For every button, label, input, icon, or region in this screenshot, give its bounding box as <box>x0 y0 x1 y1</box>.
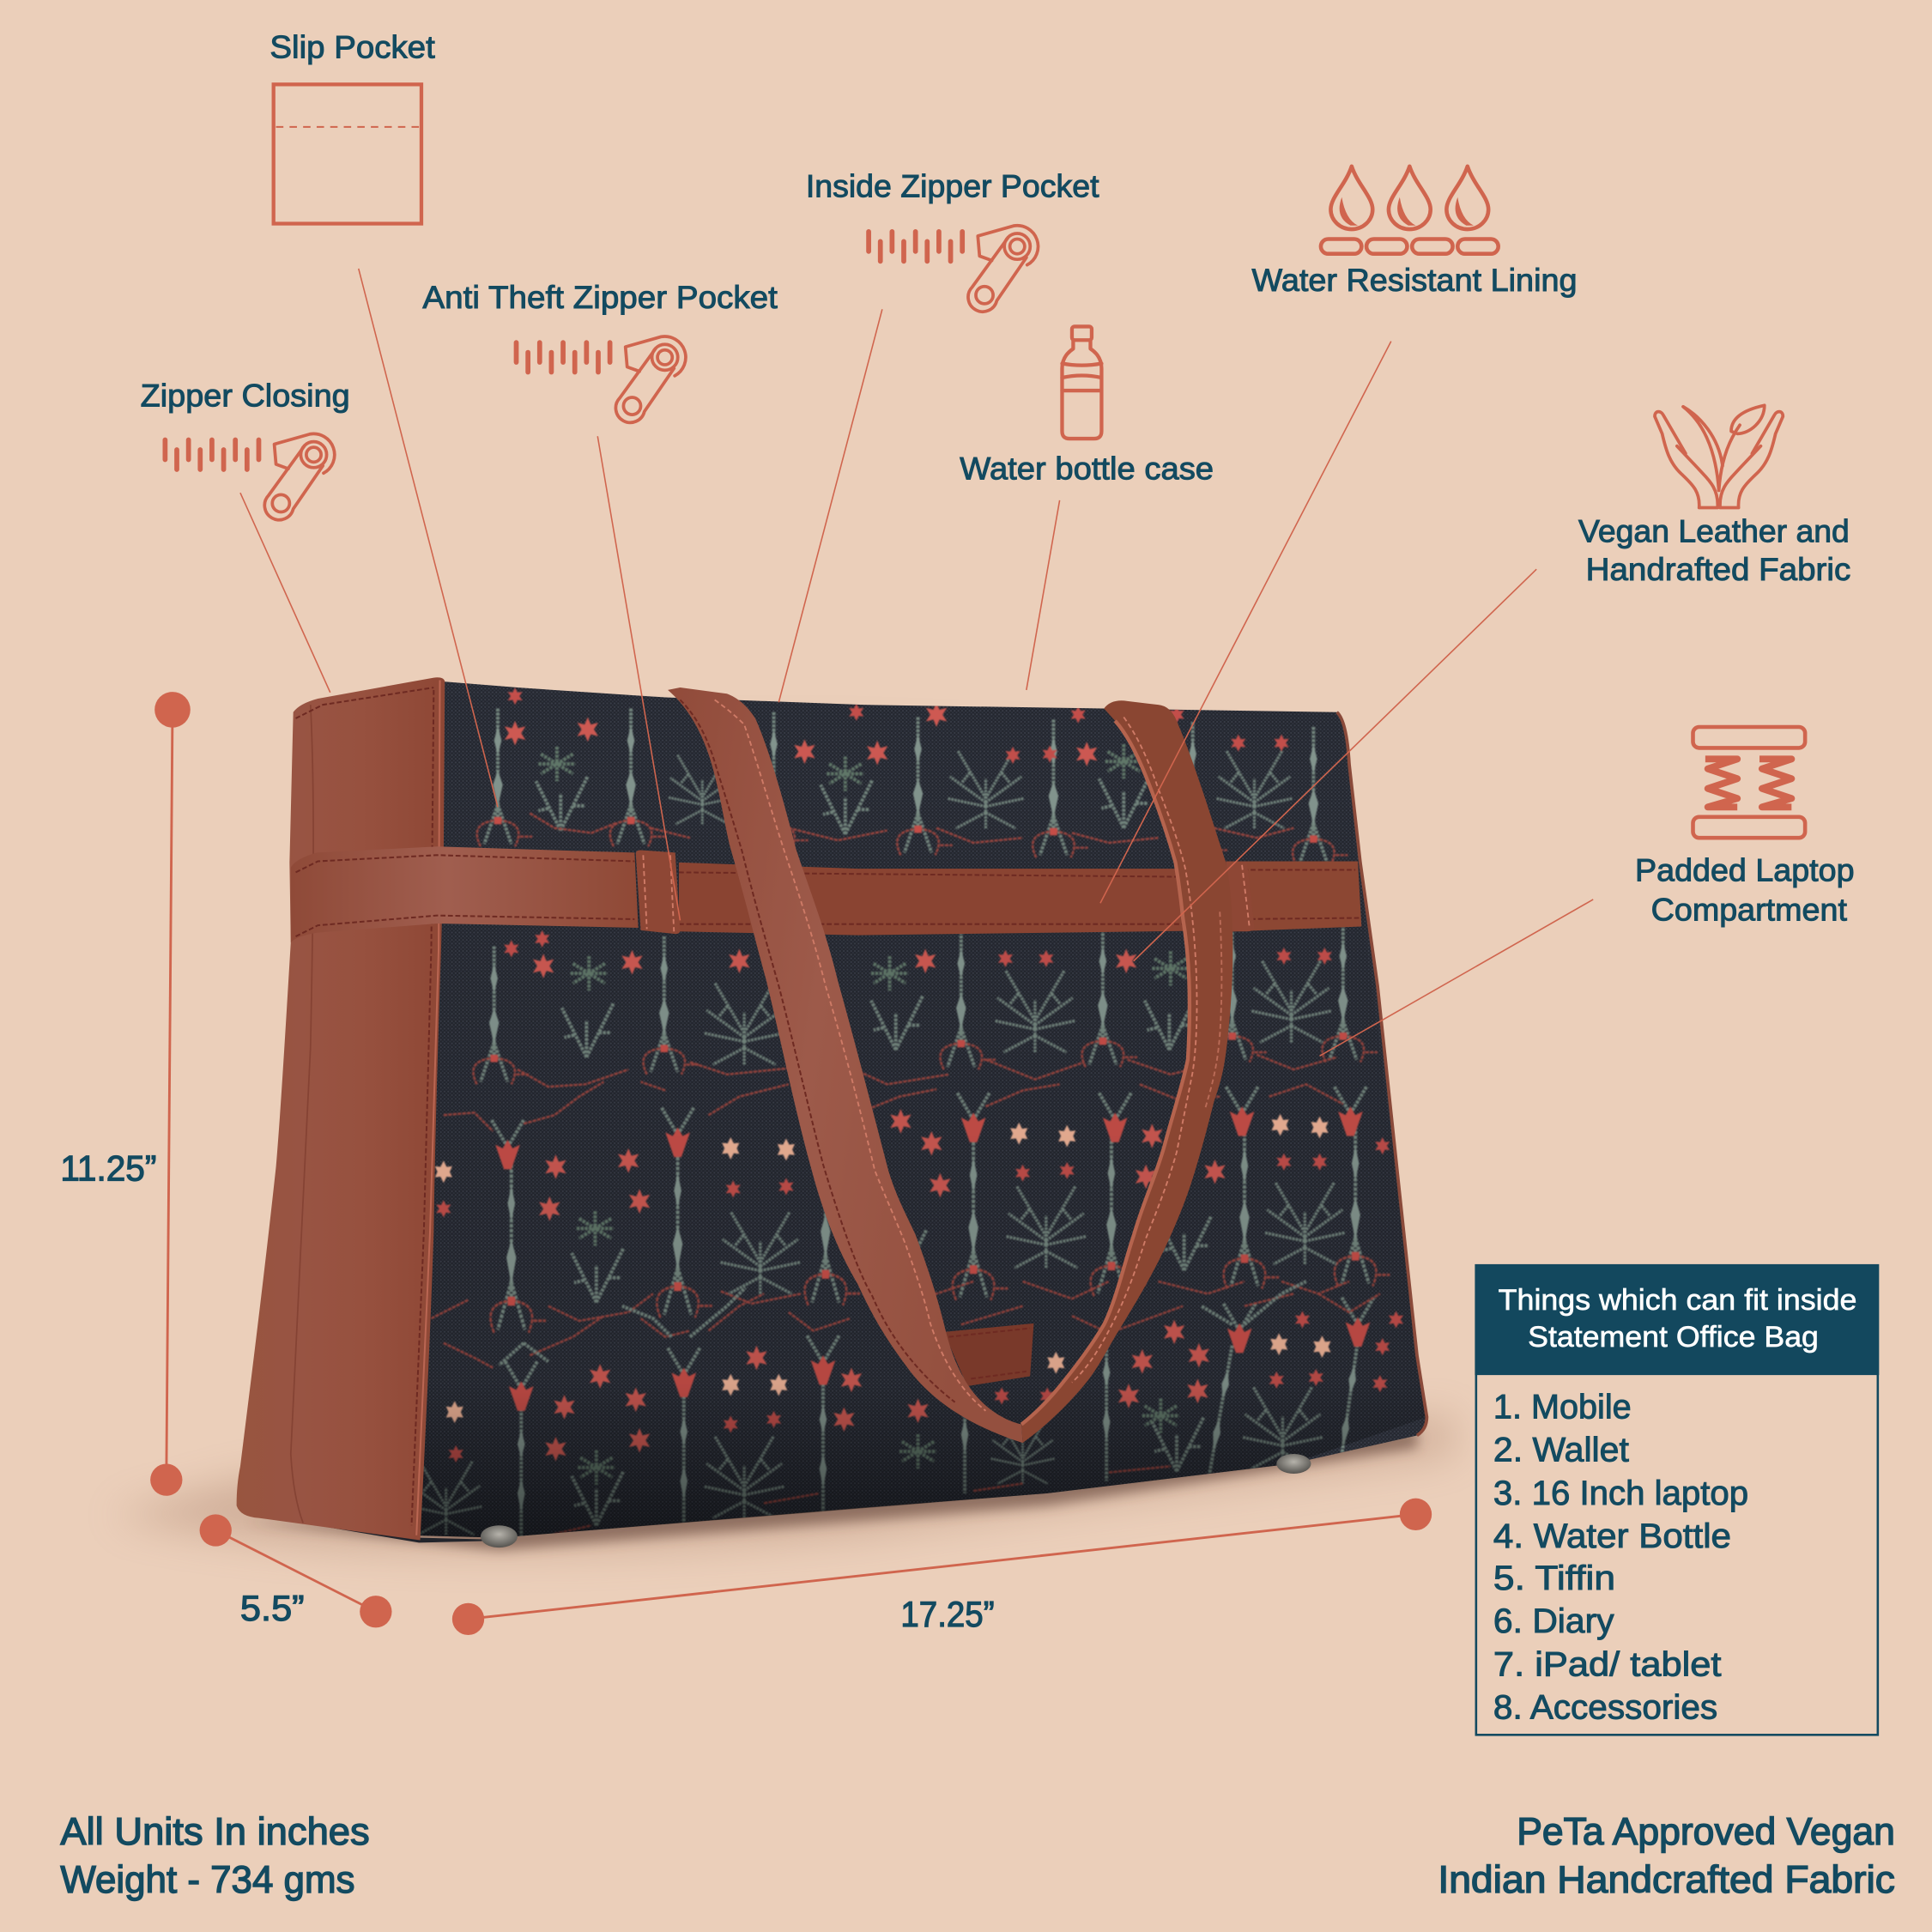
list of items: 6. Diary <box>1493 1602 1615 1640</box>
footer right: certification: PeTa Approved Vegan <box>1517 1811 1895 1853</box>
feet <box>481 1454 1311 1547</box>
side leather panel <box>237 677 445 1540</box>
leather label patch <box>944 1323 1033 1386</box>
dimension: height: 11.25” <box>60 1148 156 1188</box>
callout: padded laptop compartment <box>1635 727 1855 927</box>
dimension: depth: 5.5” <box>240 1588 305 1628</box>
dimension: width: 17.25” <box>900 1594 995 1634</box>
callout: zipper closing <box>141 378 350 520</box>
icon: pocket <box>274 84 421 224</box>
list of items: 2. Wallet <box>1493 1431 1629 1469</box>
icon: zipper <box>869 226 1038 312</box>
fabric pattern <box>410 685 1403 1553</box>
right shoulder strap <box>1021 700 1232 1443</box>
panel title line 2: Statement Office Bag <box>1528 1321 1819 1354</box>
callout: vegan leather <box>1578 405 1850 587</box>
callout: anti theft zipper pocket <box>422 279 778 422</box>
label: Slip Pocket <box>270 28 435 64</box>
footer right: certification: Indian Handcrafted Fabric <box>1438 1859 1895 1901</box>
icon: zipper <box>165 433 335 520</box>
label: Water bottle case <box>960 450 1214 486</box>
leader lines <box>240 269 1593 1056</box>
panel header <box>1475 1264 1879 1375</box>
icon: padding springs <box>1693 727 1805 838</box>
footer left: units and weight: All Units In inches <box>60 1811 370 1853</box>
icon: zipper <box>517 336 686 422</box>
icon: bottle <box>1062 326 1101 439</box>
callout: inside zipper pocket <box>806 168 1099 312</box>
callout: water bottle case <box>960 326 1214 486</box>
right piping <box>1337 712 1426 1435</box>
list of items: 5. Tiffin <box>1493 1559 1615 1597</box>
icon: water drops <box>1321 167 1499 254</box>
list of items: 7. iPad/ tablet <box>1493 1644 1722 1683</box>
label: Water Resistant Lining <box>1252 262 1578 298</box>
dimension: width <box>452 1499 1432 1635</box>
footer right: certification <box>1438 1811 1895 1901</box>
label line 2: Compartment <box>1651 891 1848 927</box>
label: Inside Zipper Pocket <box>806 168 1099 204</box>
fabric bottom shading <box>407 681 1426 1538</box>
label: Zipper Closing <box>141 378 350 414</box>
list of items: 1. Mobile <box>1493 1387 1632 1426</box>
product photo: bag <box>111 677 1454 1553</box>
callout: water resistant lining <box>1252 167 1578 298</box>
callout: slip pocket <box>270 28 435 224</box>
icon: hands and plant <box>1655 405 1783 507</box>
belt loops <box>636 851 1254 934</box>
label: Anti Theft Zipper Pocket <box>422 279 778 315</box>
list of items <box>1493 1387 1748 1727</box>
footer left: units and weight <box>60 1811 370 1901</box>
list of items: 8. Accessories <box>1493 1688 1717 1727</box>
list of items: 4. Water Bottle <box>1493 1517 1731 1555</box>
belt <box>291 846 1361 942</box>
fabric sliver under side panel <box>274 1518 518 1542</box>
dimension: height <box>60 692 191 1496</box>
fabric front panel <box>407 681 1426 1553</box>
panel title: Things which can fit inside <box>1499 1284 1856 1317</box>
panel: things which can fit inside <box>1475 1264 1879 1735</box>
label line 2: Handrafted Fabric <box>1586 551 1850 587</box>
footer left: units and weight: Weight - 734 gms <box>60 1859 354 1901</box>
left shoulder strap <box>668 687 1023 1443</box>
label: Padded Laptop <box>1635 851 1855 887</box>
label: Vegan Leather and <box>1578 513 1850 549</box>
list of items: 3. 16 Inch laptop <box>1493 1474 1748 1512</box>
dimension: depth <box>200 1514 392 1628</box>
floor shadow <box>111 1417 1454 1552</box>
